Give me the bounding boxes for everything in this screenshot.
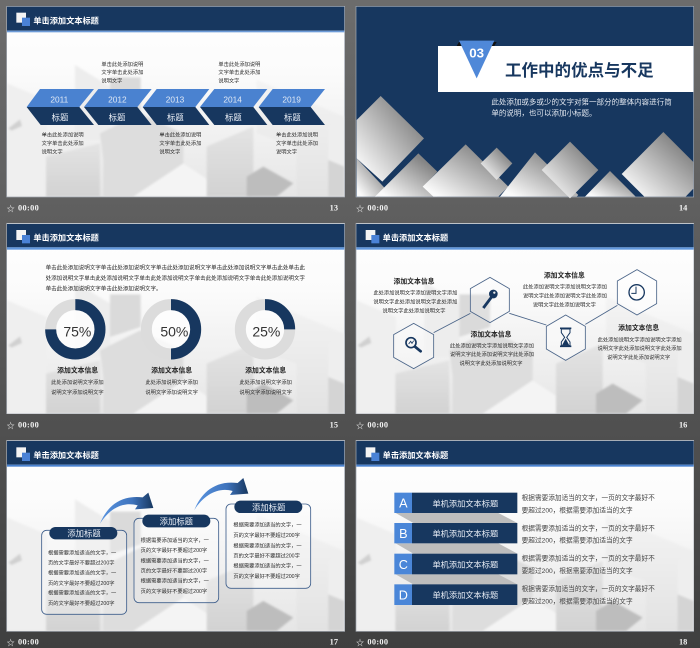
slide 18: lettered list <box>356 440 694 648</box>
connector lines <box>434 305 617 333</box>
card 3 <box>226 501 311 588</box>
row B: 要超过200，根据需要添加适当的文字 <box>522 536 633 545</box>
donut captions <box>51 366 292 396</box>
card 1: 页的文字最好不要超过200字 <box>48 579 115 587</box>
slide 14: section divider <box>356 6 694 213</box>
footer 14: 00:00 <box>367 203 388 212</box>
text block 1: 添加文本信息 <box>394 277 435 286</box>
donut captions: 此处添加说明文字添加 <box>239 378 292 386</box>
footer 16 <box>356 421 687 431</box>
footer 16: ☆ <box>356 422 364 431</box>
row C <box>394 554 655 575</box>
timeline notes: 单击此处添加说明 <box>101 60 143 68</box>
intro paragraph <box>46 264 305 292</box>
title band: 03 <box>469 45 484 60</box>
card 2: 根据需要添加适当的文字，一 <box>141 556 210 564</box>
timeline notes: 说明文字 <box>101 76 122 84</box>
hexagon: clock <box>617 270 657 315</box>
card 1: 根据需要添加适当的文字，一 <box>48 569 117 577</box>
timeline notes: 单击此处添加说明 <box>276 131 318 139</box>
card 3: 页的文字最好不要超过200字 <box>233 531 300 539</box>
card 1 <box>42 527 127 614</box>
footer 16: 16 <box>679 421 687 430</box>
timeline notes: 单击此处添加说明 <box>159 131 201 139</box>
row B: B <box>399 527 408 541</box>
header bar <box>7 224 344 250</box>
text block 4: 说明文字此处添加说明文字 <box>607 353 670 361</box>
text block 2: 此处添加说明文字添加说明文字添加 <box>450 341 534 349</box>
row C: 根据需要添加适当的文字，一页的文字最好不 <box>522 554 655 563</box>
donut captions: 说明文字添加说明文字 <box>51 388 104 396</box>
donut 25%: 25% <box>252 323 280 339</box>
title band: 工作中的优点与不足 <box>505 61 654 80</box>
footer 13 <box>7 203 338 213</box>
timeline chevrons: 标题 <box>225 112 242 122</box>
card 2: 根据需要添加适当的文字，一 <box>141 536 210 544</box>
hexagon: magnifier <box>394 323 434 369</box>
donut captions: 此处添加说明文字添加 <box>51 378 104 386</box>
card 3: 页的文字最好不要超过200字 <box>233 572 300 580</box>
footer 16: 00:00 <box>367 421 388 430</box>
card 2: 页的文字最好不要超过200字 <box>141 567 207 575</box>
footer 14 <box>356 203 688 213</box>
row D: 要超过200，根据需要添加适当的文字 <box>522 596 633 605</box>
text block 3: 添加文本信息 <box>544 271 585 280</box>
diamonds <box>357 96 693 198</box>
footer 17 <box>7 638 338 648</box>
header bar <box>356 224 694 250</box>
timeline notes: 说明文字 <box>42 147 63 155</box>
timeline chevrons: 2014 <box>223 95 242 105</box>
text block 2: 说明文字此处添加说明文字此处添加 <box>450 350 534 358</box>
donut captions: 添加文本信息 <box>245 366 286 375</box>
donut captions: 说明文字添加说明文字 <box>239 388 292 396</box>
slide 16: hexagon flow <box>356 223 694 431</box>
footer 18: ☆ <box>356 639 364 648</box>
donut captions: 添加文本信息 <box>57 366 98 375</box>
card 1: 页的文字最好不要超过200字 <box>48 558 115 566</box>
slide 17: stepped cards <box>6 440 345 648</box>
text block 4: 添加文本信息 <box>618 323 659 332</box>
header bar: 单击添加文本标题 <box>33 233 99 243</box>
timeline chevrons: 2019 <box>282 95 301 105</box>
timeline chevrons: 2012 <box>108 95 127 105</box>
row A: A <box>399 497 408 511</box>
row B: 根据需要添加适当的文字，一页的文字最好不 <box>522 523 655 532</box>
header bar: 单击添加文本标题 <box>33 450 99 460</box>
card 2: 页的文字最好不要超过200字 <box>141 546 207 554</box>
card 1: 添加标题 <box>67 529 101 539</box>
card 2: 根据需要添加适当的文字，一 <box>141 577 210 585</box>
text block 3: 此处添加说明文字添加说明文字添加 <box>523 282 607 290</box>
card 1: 根据需要添加适当的文字，一 <box>48 548 117 556</box>
timeline notes <box>42 60 318 155</box>
timeline notes: 单击此处添加说明 <box>42 131 84 139</box>
card 1: 页的文字最好不要超过200字 <box>48 599 115 607</box>
footer 15: ☆ <box>7 422 15 431</box>
row D <box>394 584 655 605</box>
card 3: 根据需要添加适当的文字，一 <box>233 541 302 549</box>
donut 50%: 50% <box>160 323 188 339</box>
donut 75%: 75% <box>63 323 91 339</box>
slide 13: timeline <box>6 6 345 213</box>
footer 18: 18 <box>679 638 687 647</box>
row C: C <box>399 558 408 572</box>
card 2: 页的文字最好不要超过200字 <box>141 587 207 595</box>
timeline chevrons: 2011 <box>50 95 69 105</box>
footer 15: 00:00 <box>18 421 39 430</box>
text block 4: 说明文字此处添加说明文字此处添加 <box>598 344 682 352</box>
donut captions: 说明文字添加说明文字 <box>145 388 198 396</box>
donut 25% <box>240 305 290 354</box>
footer 13: 00:00 <box>18 203 39 212</box>
header bar <box>7 7 344 32</box>
footer 14: ☆ <box>356 204 364 213</box>
timeline chevrons: 标题 <box>284 112 301 122</box>
section description: 单的说明，也可以添加小标题。 <box>491 108 597 118</box>
section description <box>491 97 672 118</box>
footer 18: 00:00 <box>367 638 388 647</box>
card 1: 根据需要添加适当的文字，一 <box>48 589 117 597</box>
row A <box>394 493 655 514</box>
card 3: 添加标题 <box>252 502 286 512</box>
row A: 单机添加文本标题 <box>432 498 498 508</box>
timeline chevrons <box>27 89 325 125</box>
row C: 单机添加文本标题 <box>432 559 498 569</box>
timeline notes: 文字单击此处添加 <box>42 139 84 147</box>
timeline notes: 文字单击此处添加 <box>276 139 318 147</box>
header bar: 单击添加文本标题 <box>383 233 448 243</box>
intro paragraph: 单击此处添加说明文字单击此处添加说明文字。 <box>46 284 161 292</box>
row D: D <box>399 589 408 603</box>
header bar <box>356 441 694 467</box>
intro paragraph: 单击此处添加说明文字单击此处添加说明文字单击此处添加说明文字单击此处添加说明文字单击此处单击此 <box>46 264 305 272</box>
timeline chevrons: 标题 <box>109 112 126 122</box>
title band <box>438 41 693 92</box>
hexagon: key <box>470 277 509 323</box>
donut captions: 添加文本信息 <box>151 366 192 375</box>
row A: 要超过200，根据需要添加适当的文字 <box>522 505 633 514</box>
arrow 2 <box>194 478 248 510</box>
timeline notes: 文字单击此处添加 <box>218 68 260 76</box>
text block 4: 此处添加说明文字添加说明文字添加 <box>598 335 682 343</box>
row D: 根据需要添加适当的文字，一页的文字最好不 <box>522 584 655 593</box>
card 2 <box>134 515 219 603</box>
header bar: 单击添加文本标题 <box>383 450 448 460</box>
donut 50% <box>146 305 196 354</box>
footer 17: ☆ <box>7 639 15 648</box>
timeline notes: 单击此处添加说明 <box>218 60 260 68</box>
section description: 此处添加或多或少的文字对第一部分的整体内容进行简 <box>491 97 672 107</box>
text block 3 <box>523 271 607 308</box>
text block 2: 添加文本信息 <box>471 329 512 338</box>
timeline notes: 说明文字 <box>276 147 297 155</box>
footer 17: 17 <box>330 638 338 647</box>
timeline notes: 说明文字 <box>159 147 180 155</box>
card 3: 根据需要添加适当的文字，一 <box>233 521 302 529</box>
hexagon: hourglass <box>546 315 585 360</box>
card 3: 页的文字最好不要超过200字 <box>233 552 300 560</box>
row A: 根据需要添加适当的文字，一页的文字最好不 <box>522 493 655 502</box>
timeline notes: 文字单击此处添加 <box>159 139 201 147</box>
row D: 单机添加文本标题 <box>432 590 498 600</box>
text block 4 <box>598 323 682 361</box>
timeline notes: 说明文字 <box>218 76 239 84</box>
row B: 单机添加文本标题 <box>432 529 498 539</box>
timeline chevrons: 2013 <box>166 95 185 105</box>
donut captions: 此处添加说明文字添加 <box>145 378 198 386</box>
footer 15 <box>7 421 338 431</box>
slide 15: donut charts <box>6 223 345 431</box>
timeline notes: 文字单击此处添加 <box>101 68 143 76</box>
text block 2 <box>450 329 534 367</box>
card 2: 添加标题 <box>160 516 194 526</box>
card 3: 根据需要添加适当的文字，一 <box>233 562 302 570</box>
text block 3: 说明文字此处添加说明文字此处添加 <box>523 291 607 299</box>
timeline chevrons: 标题 <box>52 112 69 122</box>
text block 1 <box>373 277 457 314</box>
footer 15: 15 <box>330 421 338 430</box>
footer 13: ☆ <box>7 204 15 213</box>
row shadows <box>396 513 517 584</box>
donut 75% <box>51 305 100 354</box>
timeline chevrons: 标题 <box>167 112 184 122</box>
footer 17: 00:00 <box>18 638 39 647</box>
text block 1: 说明文字此处添加说明文字此处添加 <box>373 297 457 305</box>
row C: 要超过200，根据需要添加适当的文字 <box>522 566 633 575</box>
header bar <box>7 441 344 467</box>
intro paragraph: 处添加说明文字单击此处添加说明文字单击此处添加说明文字单击此处添加说明文字单击此处添加说明文字 <box>46 274 305 282</box>
header bar: 单击添加文本标题 <box>33 15 99 25</box>
footer 14: 14 <box>679 203 688 212</box>
text block 2: 说明文字此处添加说明文字 <box>460 359 522 367</box>
text block 3: 说明文字此处添加说明文字 <box>533 300 596 308</box>
text block 1: 此处添加说明文字添加说明文字添加 <box>373 288 457 296</box>
text block 1: 说明文字此处添加说明文字 <box>382 306 446 314</box>
arrow 1 <box>100 493 153 524</box>
footer 18 <box>356 638 687 648</box>
footer 13: 13 <box>330 203 338 212</box>
row B <box>394 523 655 545</box>
